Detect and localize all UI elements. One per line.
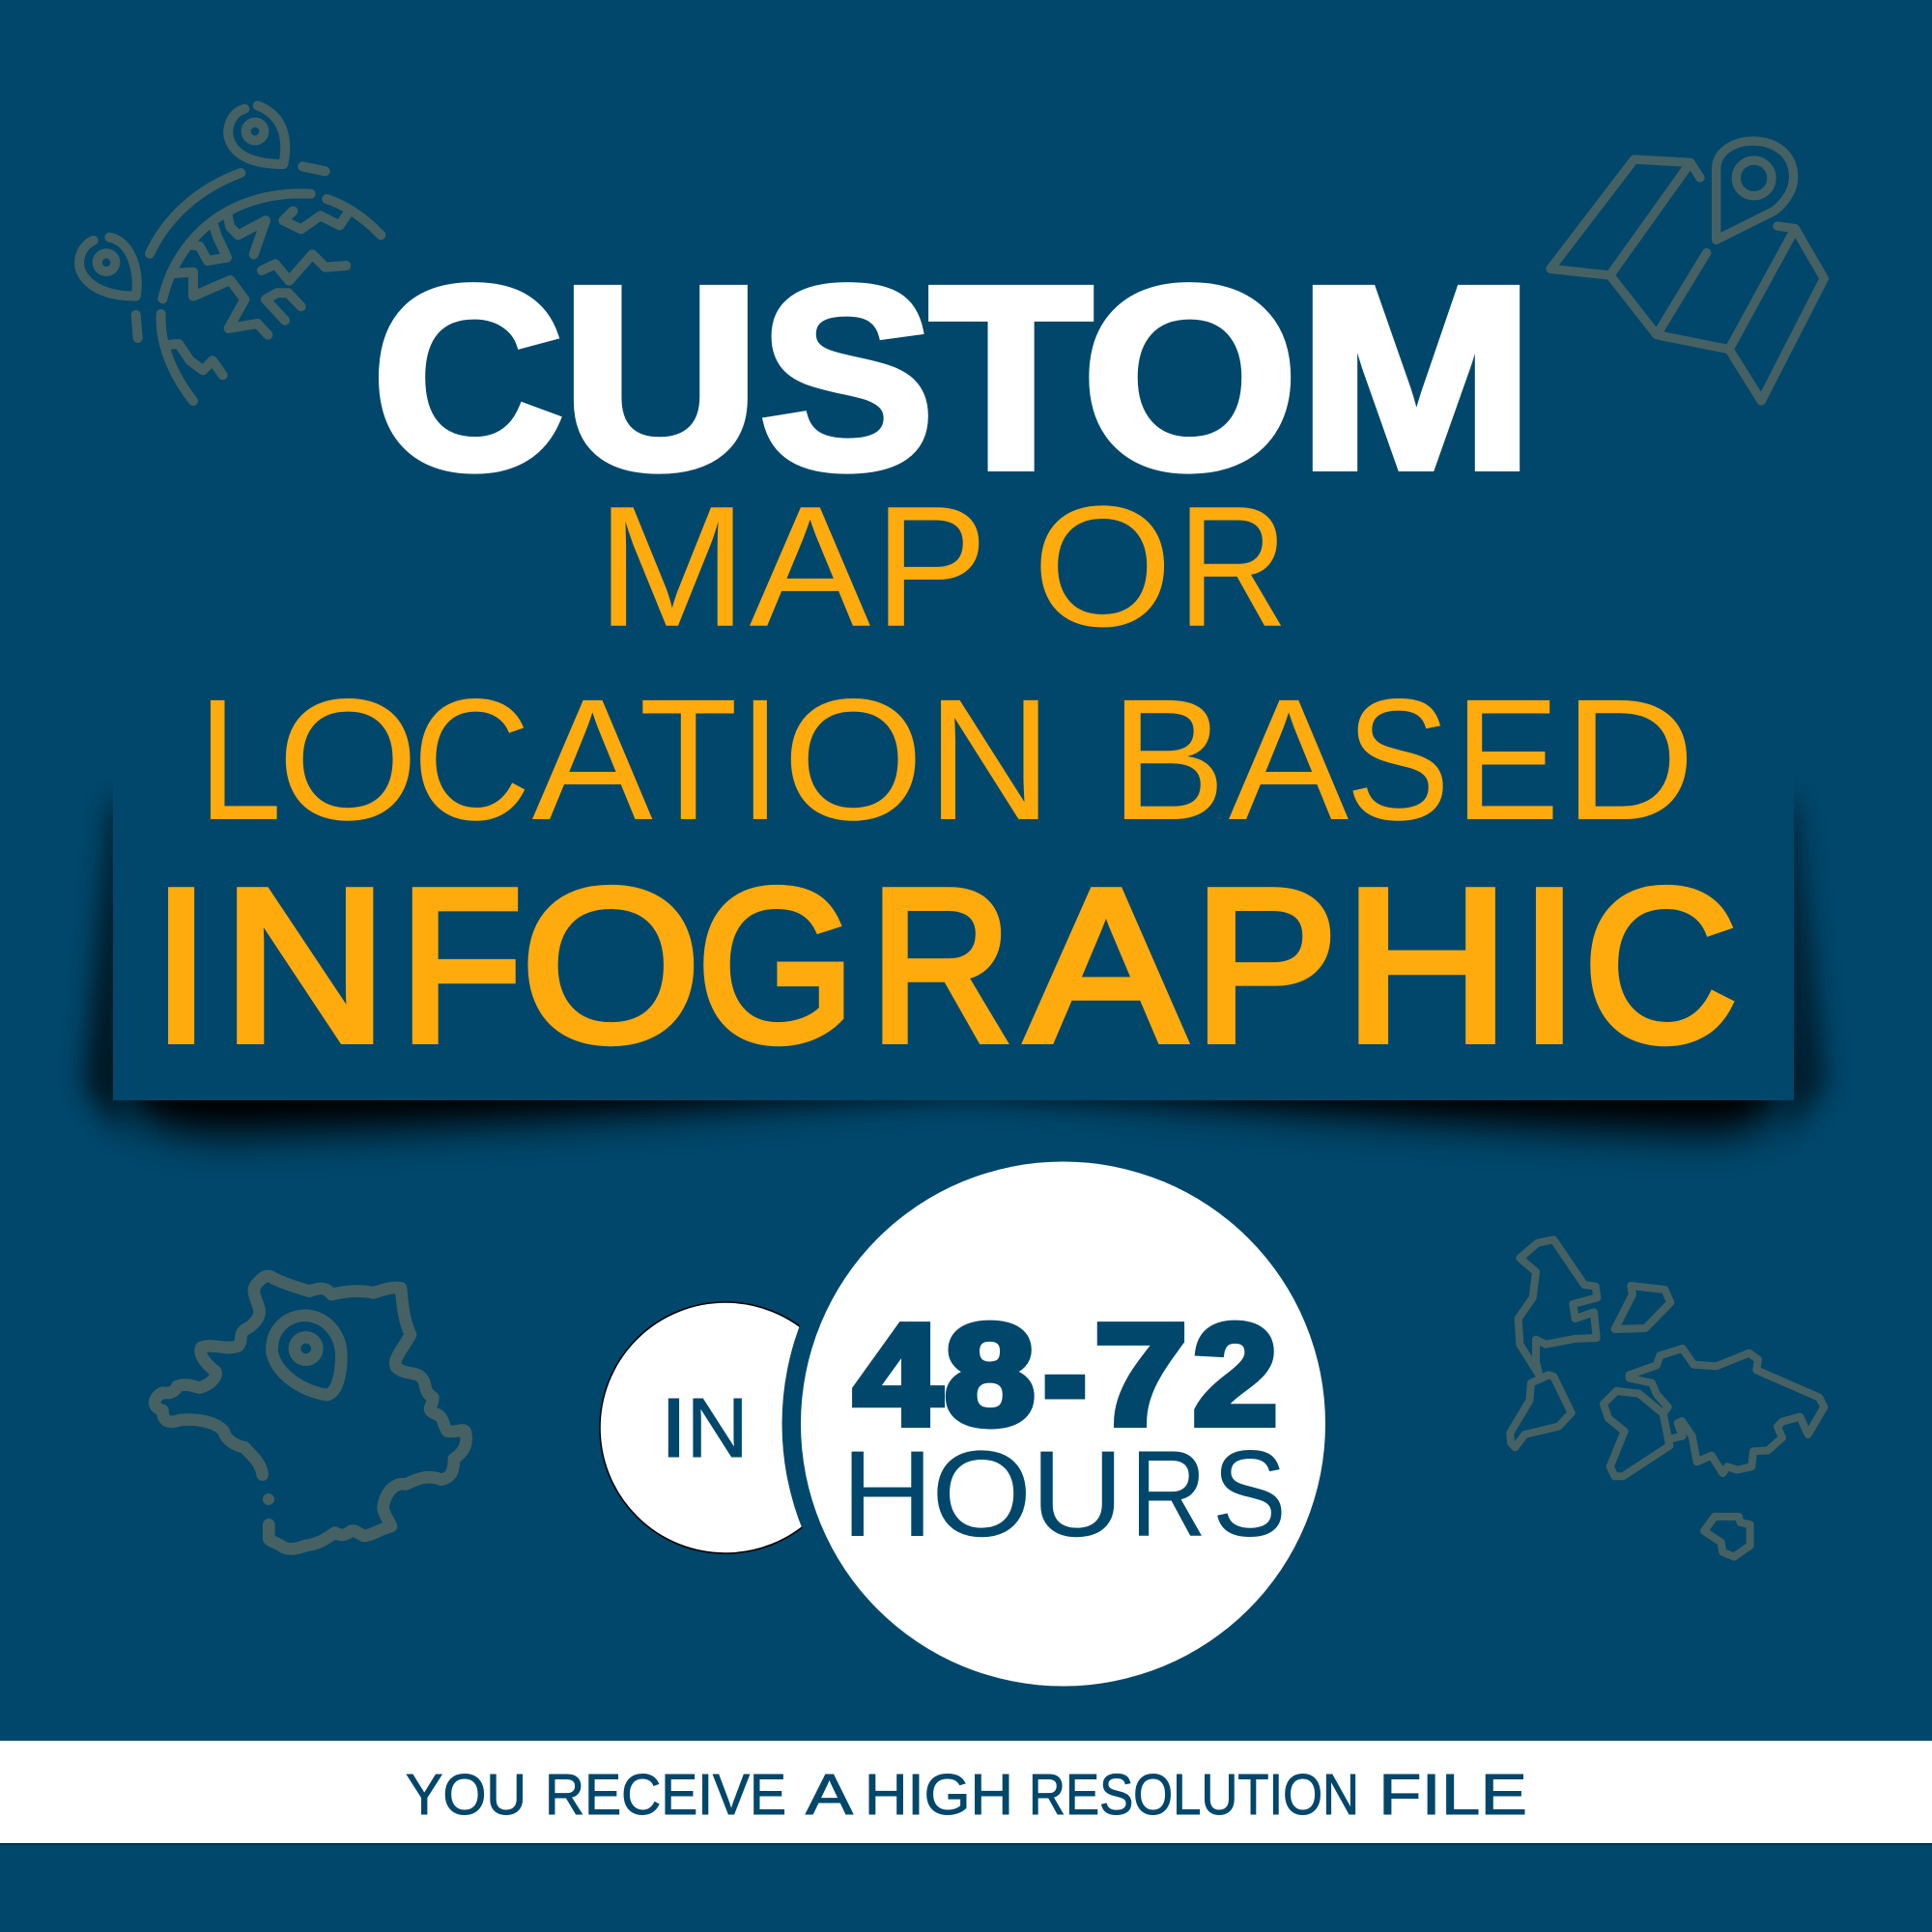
title: LOCATION BASED: O: [277, 663, 419, 856]
title: INFOGRAPHIC: P: [1194, 843, 1338, 1087]
footer band: [0, 1741, 1932, 1845]
title: INFOGRAPHIC: F: [399, 843, 523, 1087]
title: INFOGRAPHIC: G: [696, 843, 855, 1087]
title: MAP OR: M: [596, 470, 748, 663]
title: LOCATION BASED: A: [1229, 663, 1350, 856]
title: MAP OR: P: [874, 470, 984, 663]
badge: large circle 48-72 hours: 8: [945, 1295, 1035, 1455]
title: INFOGRAPHIC: C: [1583, 843, 1738, 1087]
title: LOCATION BASED: O: [782, 663, 923, 856]
badge: large circle 48-72 hours: H: [841, 1425, 933, 1562]
footer text: A: [806, 1763, 854, 1827]
title: LOCATION BASED: D: [1563, 663, 1695, 856]
badge: small circle IN: I: [659, 1381, 688, 1475]
badge: large circle 48-72 hours: -: [1043, 1295, 1087, 1455]
title: INFOGRAPHIC: I: [153, 843, 210, 1087]
footer text: FILE: [1378, 1763, 1527, 1827]
icon: turtle with location pins: [79, 105, 381, 401]
badge: large circle 48-72 hours: 2: [1193, 1295, 1277, 1455]
title: LOCATION BASED: L: [198, 663, 282, 856]
badge: large circle 48-72 hours: O: [931, 1425, 1032, 1562]
badge: large circle 48-72 hours: U: [1031, 1425, 1124, 1562]
title: LOCATION BASED: I: [740, 663, 781, 856]
title: LOCATION BASED: N: [926, 663, 1052, 856]
footer text: RESOLUTION: [1029, 1763, 1359, 1827]
title: LOCATION BASED: A: [532, 663, 653, 856]
title: LOCATION BASED: E: [1455, 663, 1559, 856]
title: CUSTOM: S: [759, 233, 934, 524]
footer text: RECEIVE: [545, 1763, 786, 1827]
title: CUSTOM: C: [372, 233, 564, 524]
title: CUSTOM: U: [561, 233, 760, 524]
title: LOCATION BASED: C: [412, 663, 531, 856]
icon: folded map with pin: [1550, 141, 1824, 401]
badge: large circle 48-72 hours: [801, 1161, 1325, 1687]
icon: world map outline: [1510, 1239, 1824, 1557]
footer text: YOU: [406, 1763, 526, 1827]
title: INFOGRAPHIC: R: [869, 843, 1012, 1087]
title: INFOGRAPHIC: H: [1344, 843, 1510, 1087]
title: MAP OR: R: [1177, 470, 1289, 663]
title: LOCATION BASED: B: [1110, 663, 1226, 856]
footer text: HIGH: [865, 1763, 1013, 1827]
badge: small circle IN: [600, 1143, 1345, 1705]
title: LOCATION BASED: T: [639, 663, 738, 856]
banner with drop shadow: [85, 753, 1826, 1135]
icon: France outline with pin: [155, 1276, 467, 1548]
title: CUSTOM: O: [1082, 233, 1298, 524]
title: INFOGRAPHIC: N: [222, 843, 388, 1087]
badge: large circle 48-72 hours: 7: [1094, 1295, 1187, 1455]
title: MAP OR: O: [1033, 470, 1173, 663]
badge: large circle 48-72 hours: S: [1212, 1425, 1287, 1562]
title: LOCATION BASED: S: [1346, 663, 1450, 856]
badge: large circle 48-72 hours: R: [1130, 1425, 1207, 1562]
title: MAP OR: A: [750, 470, 870, 663]
title: INFOGRAPHIC: I: [1520, 843, 1578, 1087]
title: CUSTOM: M: [1298, 233, 1534, 524]
title: INFOGRAPHIC: O: [521, 843, 700, 1087]
title: INFOGRAPHIC: A: [1027, 843, 1184, 1087]
badge: large circle 48-72 hours: 4: [854, 1295, 941, 1455]
title: CUSTOM: T: [929, 233, 1093, 524]
badge: small circle IN: N: [687, 1381, 749, 1475]
